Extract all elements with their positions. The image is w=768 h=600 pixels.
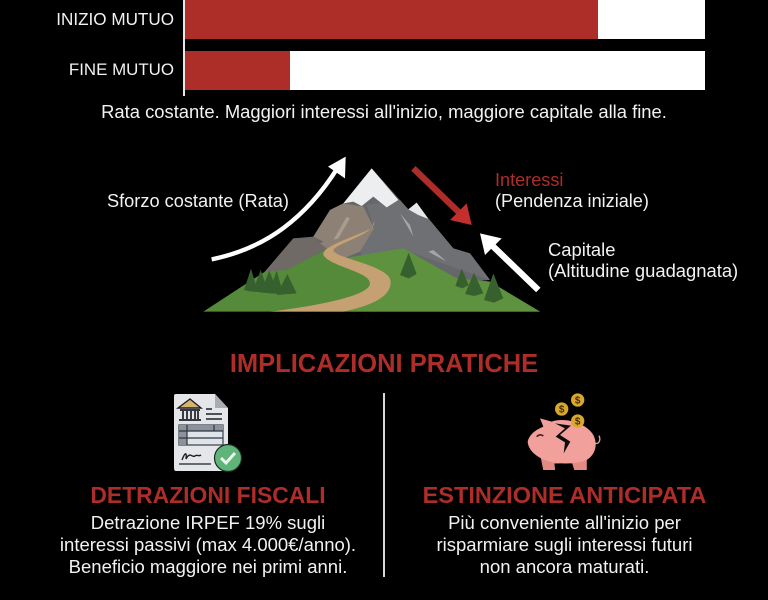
text: detrazioni: Beneficio maggiore nei primi anni. (69, 556, 347, 577)
chart caption: Rata costante. Maggiori interessi all'inizio, maggiore capitale alla fine. (101, 101, 667, 122)
bar chart: interest vs capital (56, 0, 705, 96)
icon: tax document (174, 394, 242, 472)
label: interessi: Interessi (495, 170, 563, 190)
subheading: estinzione anticipata: ESTINZIONE ANTICIPATA (423, 482, 706, 508)
text: estinzione: risparmiare sugli interessi futuri (436, 534, 692, 555)
subheading: detrazioni fiscali: DETRAZIONI FISCALI (90, 482, 326, 508)
bar: inizio mutuo (185, 0, 705, 39)
label: sforzo costante: Sforzo costante (Rata) (107, 191, 289, 211)
text: detrazioni (60, 512, 356, 577)
text: detrazioni: interessi passivi (max 4.000€/anno). (60, 534, 356, 555)
label: inizio mutuo: INIZIO MUTUO (56, 10, 174, 29)
panel: estinzione anticipata (423, 393, 706, 577)
text: estinzione (436, 512, 692, 577)
label: interessi (495, 170, 649, 211)
bar: fine mutuo (185, 51, 705, 90)
icon: broken piggy bank: $ (575, 417, 581, 428)
icon: broken piggy bank: $ (575, 396, 581, 407)
text: estinzione: Più conveniente all'inizio per (448, 512, 681, 533)
axis line (183, 0, 185, 96)
label: fine mutuo: FINE MUTUO (69, 60, 174, 79)
icon: broken piggy bank: $ (559, 405, 565, 416)
icon: broken piggy bank (528, 393, 600, 470)
label: interessi: (Pendenza iniziale) (495, 191, 649, 211)
illustration: mountain with arrows (204, 156, 540, 312)
label: capitale: Capitale (548, 239, 615, 260)
text: detrazioni: Detrazione IRPEF 19% sugli (91, 512, 325, 533)
label: capitale: (Altitudine guadagnata) (548, 260, 738, 281)
label: capitale (548, 239, 738, 281)
icon: mountain (203, 168, 540, 312)
heading: implicazioni pratiche: IMPLICAZIONI PRATICHE (230, 350, 538, 378)
arrow: capitale (480, 233, 538, 290)
arrow: interessi (413, 168, 472, 225)
arrow: sforzo costante (212, 157, 346, 259)
text: estinzione: non ancora maturati. (480, 556, 649, 577)
vertical divider (383, 393, 385, 577)
panel: detrazioni fiscali (60, 394, 356, 577)
